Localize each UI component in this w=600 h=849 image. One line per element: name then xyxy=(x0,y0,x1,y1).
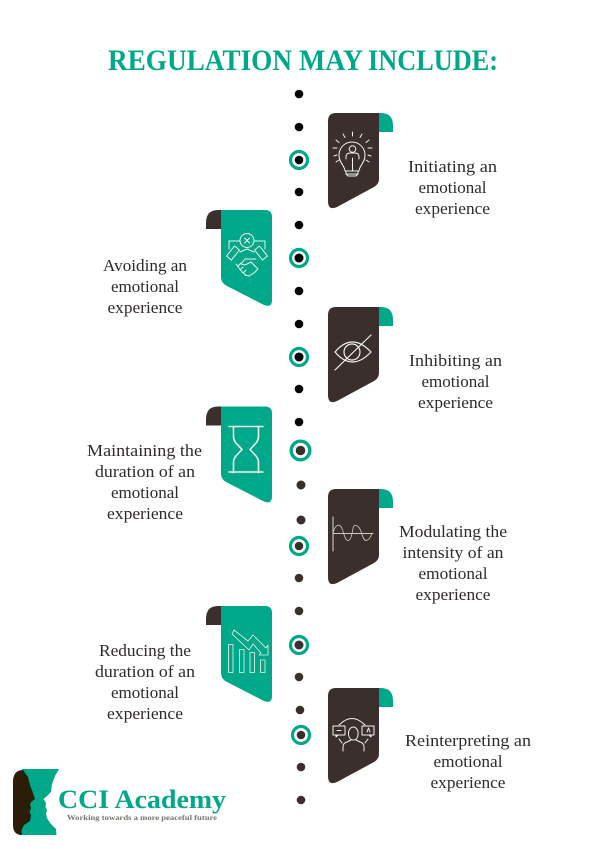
text: inhibiting: Inhibiting an xyxy=(409,351,502,370)
icon: wave graph xyxy=(333,517,373,551)
text: reducing: Reducing the xyxy=(99,641,191,660)
text: modulating: intensity of an xyxy=(402,543,504,562)
text: reducing: emotional xyxy=(111,683,179,702)
logo: CCI Academy xyxy=(13,769,226,835)
timeline dots xyxy=(295,90,306,804)
text: maintaining xyxy=(87,441,202,523)
icon: hourglass xyxy=(229,426,263,472)
text: maintaining: Maintaining the xyxy=(87,441,202,460)
text: modulating: Modulating the xyxy=(399,522,507,541)
text: initiating: Initiating an xyxy=(408,157,497,176)
icon: facing profiles xyxy=(13,769,59,835)
text: maintaining: experience xyxy=(107,504,183,523)
text: inhibiting xyxy=(409,351,502,412)
icon: falling bar chart xyxy=(228,630,268,672)
timeline ring markers xyxy=(290,152,310,744)
panel: maintaining xyxy=(206,406,272,502)
logo tagline: Working towards a more peaceful future xyxy=(67,813,218,822)
text: maintaining: emotional xyxy=(111,483,179,502)
icon: handshake with cross xyxy=(226,234,268,276)
text: reinterpreting: Reinterpreting an xyxy=(405,731,531,750)
icon: light bulb with person xyxy=(333,132,372,176)
panel: avoiding xyxy=(206,210,272,306)
icon: crossed-out eye xyxy=(335,335,371,370)
panel: inhibiting xyxy=(328,307,393,402)
icon: person with speech boxes xyxy=(333,718,374,751)
text: maintaining: duration of an xyxy=(95,462,195,481)
logo wordmark: CCI Academy xyxy=(58,785,226,814)
text: reinterpreting xyxy=(405,731,531,792)
text: modulating: experience xyxy=(416,585,490,604)
text: reinterpreting: experience xyxy=(430,773,506,792)
text: avoiding: emotional xyxy=(111,277,179,296)
text: modulating: emotional xyxy=(418,564,488,583)
text: avoiding xyxy=(103,256,187,317)
title: MAY xyxy=(299,44,363,77)
text: inhibiting: emotional xyxy=(422,372,490,391)
text: avoiding: Avoiding an xyxy=(103,256,187,275)
panel: initiating xyxy=(328,113,393,208)
text: initiating xyxy=(408,157,497,218)
title: REGULATION xyxy=(108,44,292,77)
panel: reinterpreting xyxy=(328,688,393,783)
text: initiating: emotional xyxy=(418,178,487,197)
text: modulating xyxy=(399,522,507,604)
text: avoiding: experience xyxy=(108,298,182,317)
text: reducing: duration of an xyxy=(95,662,195,681)
panel: modulating xyxy=(328,489,393,584)
panel: reducing xyxy=(206,606,272,702)
text: reinterpreting: emotional xyxy=(434,752,503,771)
text: initiating: experience xyxy=(415,199,490,218)
title xyxy=(108,44,498,77)
text: inhibiting: experience xyxy=(418,393,493,412)
text: reducing: experience xyxy=(107,704,183,723)
text: reducing xyxy=(95,641,195,723)
title: INCLUDE: xyxy=(368,44,498,77)
